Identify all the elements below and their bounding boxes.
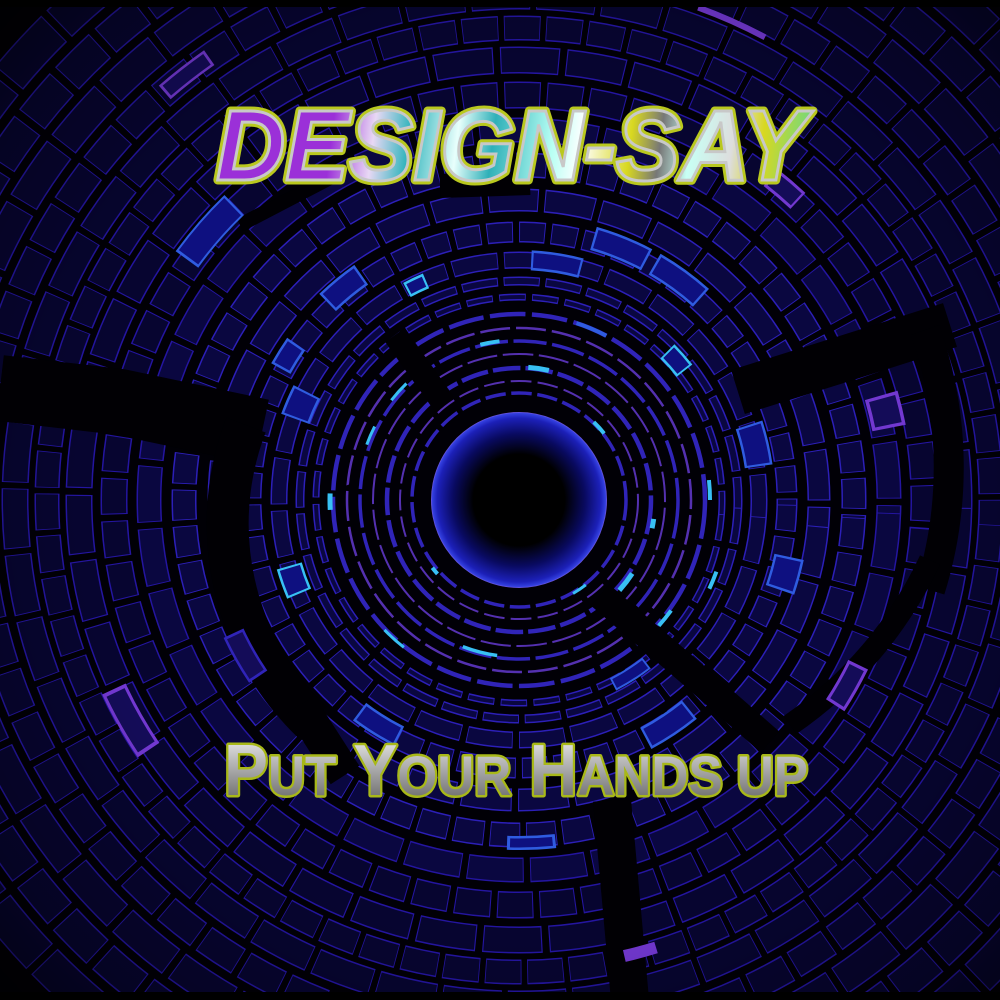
black spiral gaps [0,178,950,1000]
title: DESIGN-SAY: DESIGN-SAY [216,90,814,202]
title: DESIGN-SAY: DESIGN-SAY [216,90,814,202]
central blue disc [431,412,607,588]
subtitle: Put Your Hands up: PUT YOUR HANDS UP [224,731,808,811]
